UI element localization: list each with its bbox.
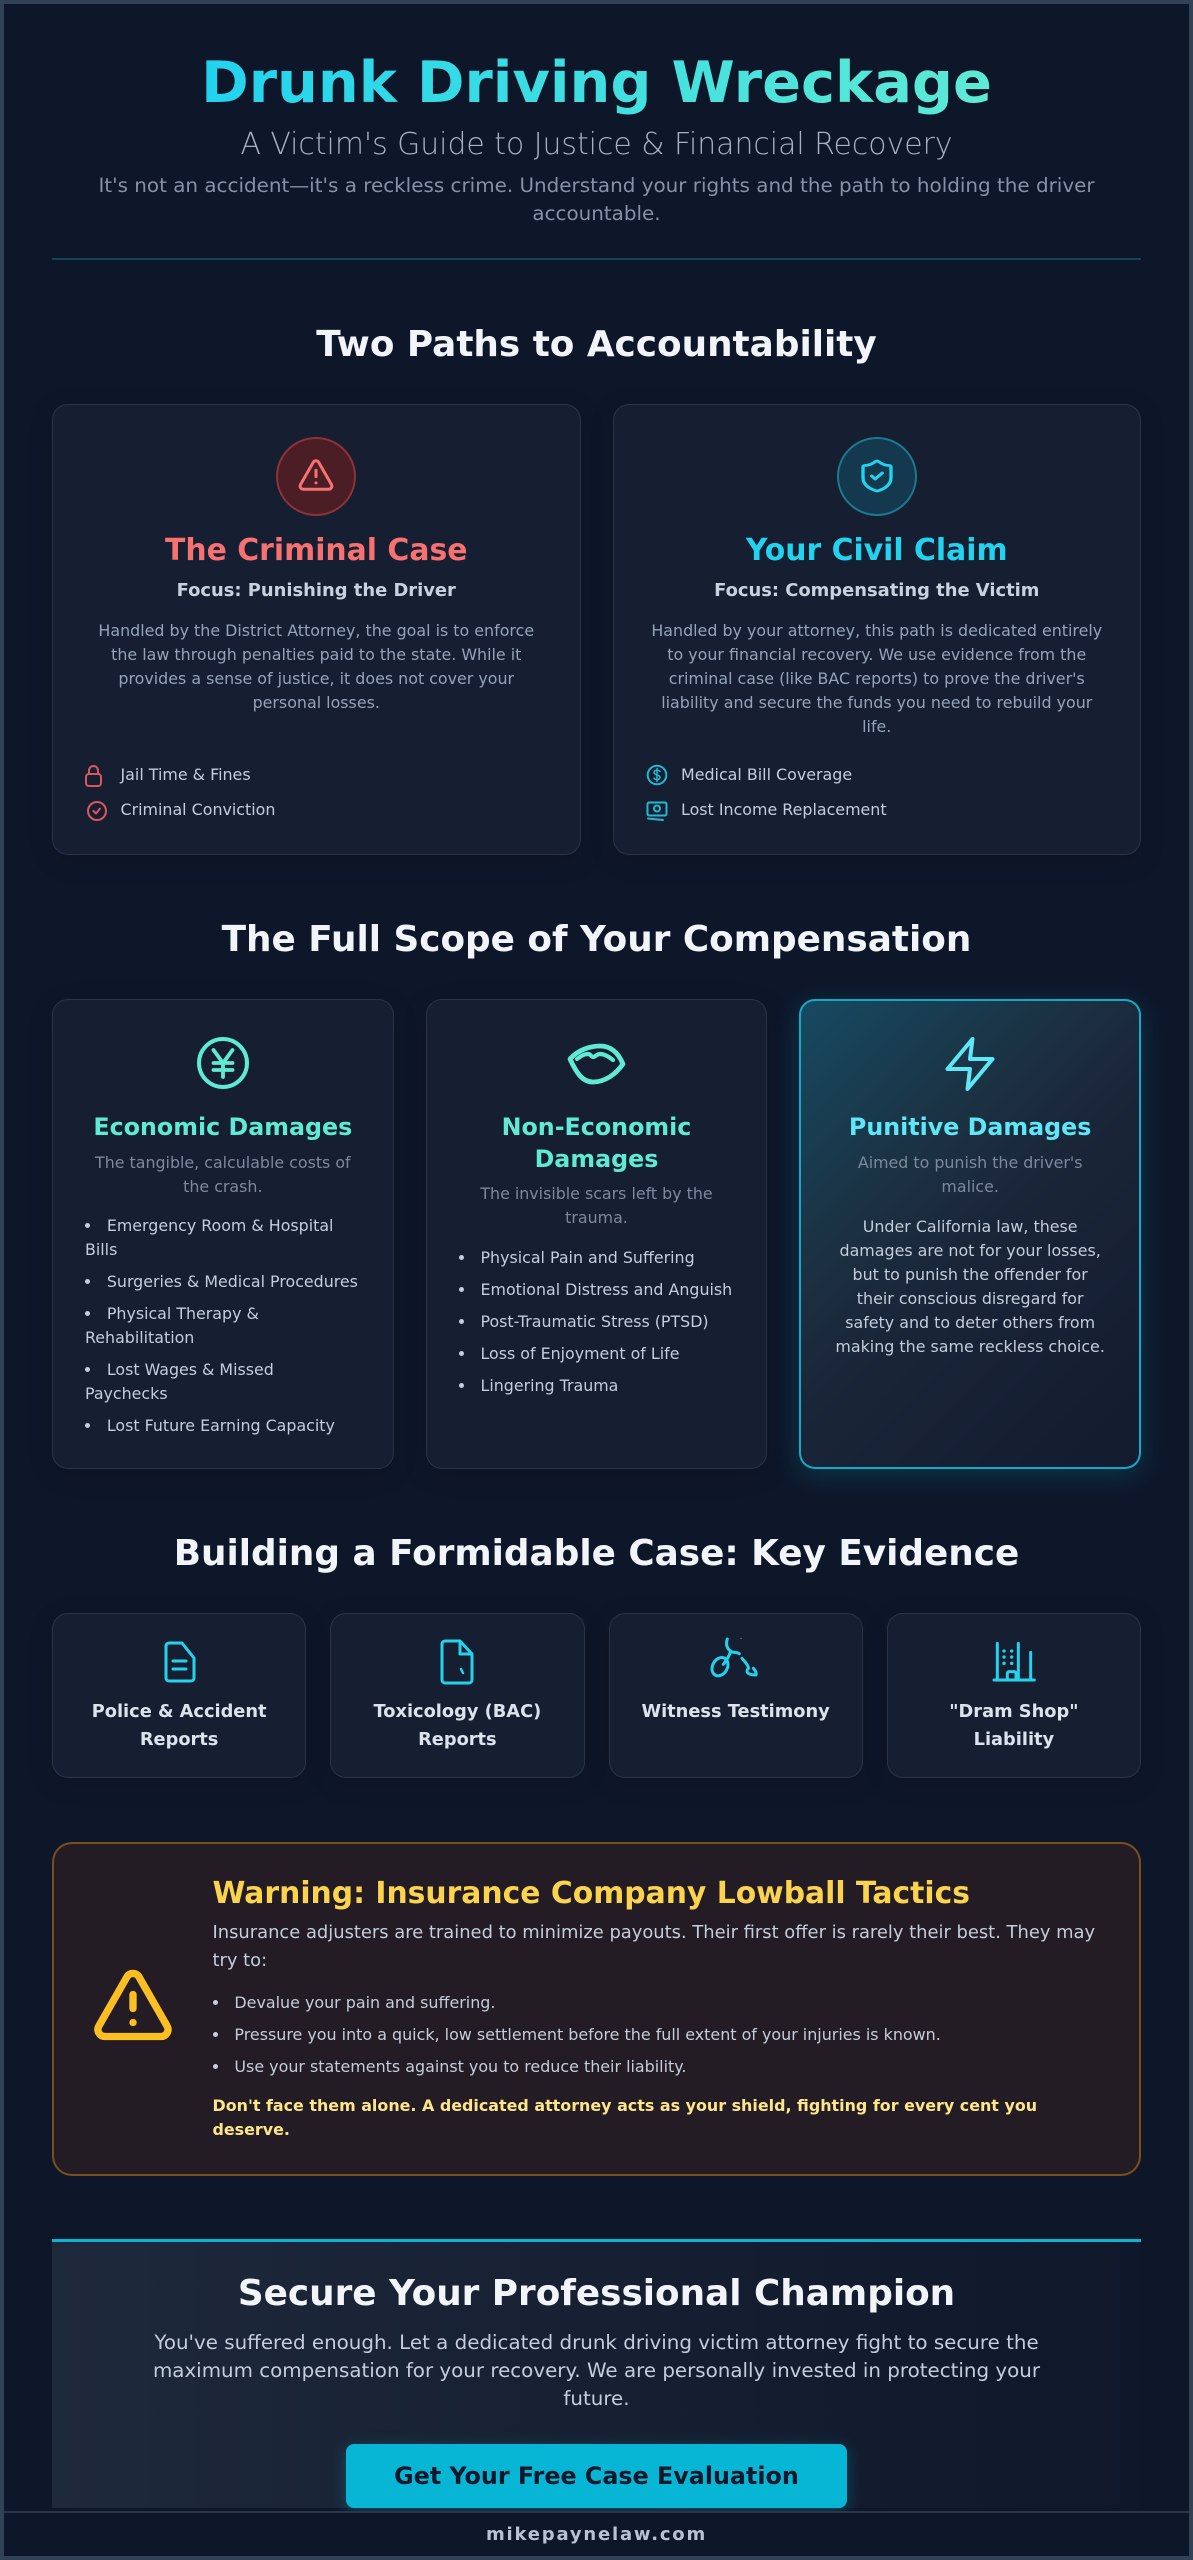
label: Witness Testimony xyxy=(641,1701,830,1722)
panel: criminal case xyxy=(52,404,580,855)
cta text: maximum compensation for your recovery. We are personally invested in protecting your xyxy=(153,2359,1040,2382)
heading: punitive: Punitive Damages xyxy=(849,1113,1091,1141)
description: life. xyxy=(862,717,891,736)
intro text: accountable. xyxy=(532,202,661,224)
cta text: future. xyxy=(563,2387,630,2410)
heading: non-economic xyxy=(502,1112,691,1172)
subtitle: non-economic xyxy=(480,1184,713,1227)
icon: banknotes xyxy=(646,802,668,821)
item: medical bills: Medical Bill Coverage xyxy=(681,765,852,784)
icon: lips xyxy=(568,1044,626,1084)
icon: warning triangle xyxy=(94,1970,172,2040)
panel: punitive damages xyxy=(799,999,1141,1469)
list: tactics: Use your statements against you to reduce their liability. xyxy=(234,2057,686,2076)
icon: document xyxy=(164,1642,196,1682)
subtitle: economic: The tangible, calculable costs of xyxy=(95,1152,351,1172)
label: Toxicology (BAC) xyxy=(374,1701,541,1722)
subtitle: non-economic: The invisible scars left by the xyxy=(480,1184,713,1203)
list: economic items: Paychecks xyxy=(85,1384,168,1403)
heading: criminal case: The Criminal Case xyxy=(165,532,467,568)
heading: two paths: Two Paths to Accountability xyxy=(316,324,877,364)
icon: check circle xyxy=(87,801,107,821)
warning intro: Insurance adjusters are trained to minimize payouts. Their first offer is rarely their best. They may xyxy=(212,1922,1095,1943)
description: punitive: Under California law, these xyxy=(863,1217,1078,1236)
label: "Dram Shop" xyxy=(949,1701,1078,1722)
description: provides a sense of justice, it does not cover your xyxy=(118,669,514,688)
label xyxy=(374,1701,541,1750)
evidence: dram shop xyxy=(887,1613,1141,1778)
list: non-economic items: Physical Pain and Suffering xyxy=(480,1248,695,1266)
panel: civil claim xyxy=(612,404,1141,855)
description: criminal case (like BAC reports) to prove the driver's xyxy=(669,669,1085,688)
intro text: It's not an accident—it's a reckless crime. Understand your rights and the path to holding the driver xyxy=(98,174,1095,196)
item: jail time xyxy=(85,765,251,787)
label: Police & Accident xyxy=(92,1701,267,1722)
footer xyxy=(0,2511,1193,2560)
list: economic items: Lost Wages & Missed xyxy=(107,1360,274,1379)
heading: warning: Warning: Insurance Company Lowball Tactics xyxy=(212,1876,970,1910)
website: mikepaynelaw.com xyxy=(486,2524,707,2545)
title: Drunk Driving Wreckage xyxy=(201,49,992,116)
description: punitive: but to punish the offender for xyxy=(853,1265,1088,1284)
list: non-economic items: Emotional Distress and Anguish xyxy=(480,1280,732,1298)
item: conviction: Criminal Conviction xyxy=(120,800,275,819)
evidence: toxicology xyxy=(330,1613,584,1778)
heading: evidence: Building a Formidable Case: Key Evidence xyxy=(174,1532,1019,1574)
description: personal losses. xyxy=(253,693,380,712)
list: economic items: Rehabilitation xyxy=(85,1328,194,1347)
description xyxy=(98,621,534,712)
heading: compensation: The Full Scope of Your Compensation xyxy=(222,918,971,960)
evidence: police reports xyxy=(52,1613,306,1778)
subtitle: A Victim's Guide to Justice & Financial Recovery xyxy=(240,127,953,162)
list: economic items: Emergency Room & Hospital xyxy=(107,1216,333,1235)
label xyxy=(949,1701,1078,1750)
icon: shield in cyan circle xyxy=(837,437,917,516)
description: punitive: their conscious disregard for xyxy=(857,1289,1084,1308)
label: Reports xyxy=(418,1729,497,1750)
list: non-economic items: Lingering Trauma xyxy=(480,1376,618,1394)
description: liability and secure the funds you need to rebuild your xyxy=(661,693,1092,712)
list: non-economic items: Post-Traumatic Stress (PTSD) xyxy=(480,1312,709,1330)
heading: economic: Economic Damages xyxy=(93,1112,352,1140)
description: punitive: safety and to deter others from xyxy=(845,1313,1095,1332)
heading: civil claim: Your Civil Claim xyxy=(746,532,1008,568)
icon: witness scribble xyxy=(710,1638,758,1678)
intro text xyxy=(98,174,1095,224)
subtitle: punitive: Aimed to punish the driver's xyxy=(858,1153,1082,1172)
icon: buildings xyxy=(992,1642,1036,1682)
description: punitive xyxy=(835,1217,1105,1356)
warning intro xyxy=(212,1922,1095,1971)
label xyxy=(92,1701,267,1750)
list: tactics: Devalue your pain and suffering. xyxy=(234,1993,495,2012)
cta text: You've suffered enough. Let a dedicated drunk driving victim attorney fight to secure the xyxy=(154,2331,1039,2354)
icon: file xyxy=(440,1640,474,1684)
panel: call to action xyxy=(52,2239,1141,2508)
list: tactics xyxy=(213,1993,941,2076)
warning conclusion: Don't face them alone. A dedicated attorney acts as your shield, fighting for every cent you xyxy=(212,2096,1037,2115)
subtitle: economic: the crash. xyxy=(183,1176,262,1196)
description: punitive: damages are not for your losses, xyxy=(840,1241,1101,1260)
icon: lock xyxy=(85,765,102,787)
description: punitive: making the same reckless choice. xyxy=(835,1337,1105,1356)
description: the law through penalties paid to the state. While it xyxy=(111,645,521,664)
icon: warning in red circle xyxy=(276,437,356,516)
warning intro: try to: xyxy=(212,1950,267,1971)
subtitle: economic xyxy=(94,1152,351,1196)
cta button: Get Your Free Case Evaluation xyxy=(394,2462,799,2490)
description: Handled by your attorney, this path is dedicated entirely xyxy=(651,621,1102,640)
panel: insurance warning xyxy=(52,1842,1141,2176)
list: economic items: Physical Therapy & xyxy=(107,1304,259,1323)
label: Liability xyxy=(974,1729,1054,1750)
icon: yen coin xyxy=(197,1037,249,1089)
list: economic items: Bills xyxy=(85,1240,117,1259)
icon: dollar circle xyxy=(646,764,668,786)
warning conclusion xyxy=(212,2096,1037,2139)
cta text xyxy=(153,2331,1040,2410)
icon: lightning bolt xyxy=(945,1037,995,1091)
description: Handled by the District Attorney, the goal is to enforce xyxy=(98,621,534,640)
item: jail time: Jail Time & Fines xyxy=(120,765,251,784)
subtitle: punitive: malice. xyxy=(941,1177,999,1196)
subtitle: non-economic: trauma. xyxy=(565,1208,628,1227)
list: non-economic items: Loss of Enjoyment of Life xyxy=(480,1344,679,1362)
list: tactics: Pressure you into a quick, low settlement before the full extent of your injuries is known. xyxy=(234,2025,941,2044)
heading: non-economic: Damages xyxy=(535,1144,658,1172)
heading: champion: Secure Your Professional Champion xyxy=(238,2273,955,2314)
label: Reports xyxy=(140,1729,218,1750)
list: economic items: Lost Future Earning Capacity xyxy=(107,1416,335,1435)
subtitle: punitive xyxy=(858,1153,1082,1196)
heading: non-economic: Non-Economic xyxy=(502,1112,691,1140)
panel: non-economic damages xyxy=(426,999,767,1469)
item: lost income: Lost Income Replacement xyxy=(681,800,887,819)
panel: economic damages xyxy=(52,999,394,1469)
cta button xyxy=(346,2444,847,2508)
list: economic items xyxy=(85,1216,358,1435)
description xyxy=(651,621,1102,736)
warning conclusion: deserve. xyxy=(212,2120,290,2139)
focus line: Focus: Punishing the Driver xyxy=(177,580,456,600)
header xyxy=(52,49,1141,260)
list: economic items: Surgeries & Medical Procedures xyxy=(107,1272,358,1291)
evidence: witness xyxy=(608,1613,863,1778)
list: non-economic items xyxy=(459,1248,732,1394)
focus line: Focus: Compensating the Victim xyxy=(714,580,1039,600)
description: to your financial recovery. We use evidence from the xyxy=(667,645,1086,664)
